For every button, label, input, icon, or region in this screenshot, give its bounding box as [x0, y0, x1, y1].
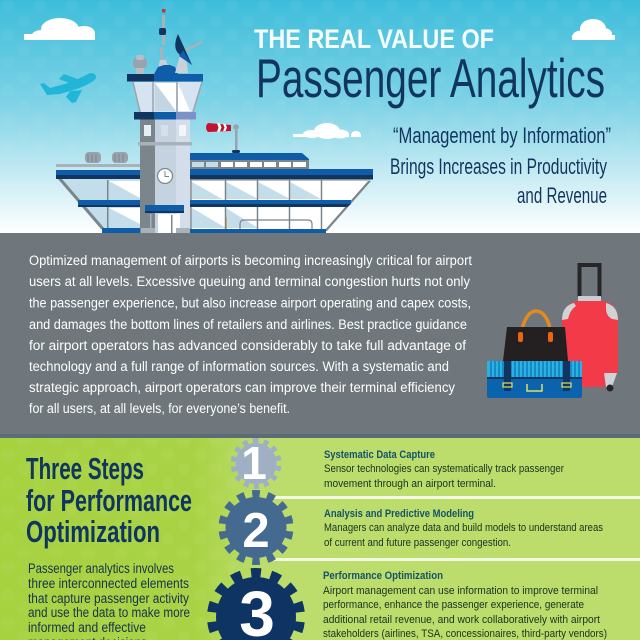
- step 1: systematic data capture: Systematic Data Capture: [324, 449, 435, 461]
- panel: green steps background: [0, 438, 640, 640]
- text block: introduction: Optimized management of airports is becoming increasingly critical for airport: [29, 253, 472, 268]
- text block: passenger analytics description: [28, 561, 190, 640]
- text block: introduction: technology and a full range of information sources. With a systematic and: [29, 359, 449, 374]
- red rolling suitcase: [562, 265, 618, 392]
- icon: gear 1: 1: [241, 437, 267, 489]
- heading: three steps: Optimization: [26, 514, 160, 549]
- heading: three steps: [26, 451, 192, 549]
- step 1: systematic data capture: Sensor technologies can systematically track passenger: [324, 463, 564, 475]
- step 1: systematic data capture: movement through an airport terminal.: [324, 478, 496, 490]
- icon: cloud middle: [293, 123, 361, 139]
- black handbag: [503, 311, 568, 361]
- step 2: analysis and predictive modeling: of current and future passenger congestion.: [324, 537, 511, 549]
- title: The Real Value Of: THE REAL VALUE OF: [254, 24, 494, 54]
- left terminal wing: [56, 152, 141, 234]
- step 3: performance optimization: stakeholders (airlines, TSA, concessionaires, third-party vendors): [323, 628, 607, 640]
- text block: introduction: strategic approach, airport operators can improve their terminal efficiency: [29, 380, 455, 395]
- text block: introduction: [29, 253, 472, 416]
- icon: gear 1: [233, 437, 279, 489]
- blue suitcase: [487, 361, 582, 398]
- step 3: performance optimization: Airport management can use information to improve terminal: [323, 585, 598, 597]
- step 2: analysis and predictive modeling: Analysis and Predictive Modeling: [324, 508, 474, 520]
- icon: gear 3: [212, 573, 300, 640]
- text block: passenger analytics description: that capture passenger activity: [28, 591, 189, 606]
- step 3: performance optimization: performance, enhance the passenger experience, generate: [323, 599, 584, 611]
- text block: passenger analytics description: informed and effective: [28, 620, 146, 635]
- panel: grey introduction band: [0, 233, 640, 438]
- illustration: airport terminal and control tower: [56, 9, 373, 234]
- text block: introduction: for airport operators has advanced considerably to take full advantage of: [29, 338, 466, 353]
- icon: gear 2: 2: [242, 504, 270, 558]
- heading: three steps: Three Steps: [26, 451, 144, 486]
- heading: three steps: for Performance: [26, 483, 192, 518]
- icon: cloud top right: [572, 19, 615, 40]
- subtitle: [390, 123, 611, 208]
- icon: luggage: [487, 265, 618, 398]
- step 3: performance optimization: additional retail revenue, and work collaboratively with airport: [323, 614, 600, 626]
- text block: introduction: and damages the bottom lines of retailers and airlines. Best practice guidance: [29, 317, 467, 332]
- step 3: performance optimization: Performance Optimization: [323, 570, 443, 582]
- text block: passenger analytics description: and use the data to make more: [28, 605, 190, 620]
- icon: cloud top left: [24, 18, 95, 40]
- icon: airplane: [40, 73, 96, 103]
- step 1: systematic data capture: [324, 449, 564, 490]
- step 2: analysis and predictive modeling: Managers can analyze data and build models to understand areas: [324, 522, 603, 534]
- text block: passenger analytics description: Passenger analytics involves: [28, 561, 174, 576]
- text block: introduction: users at all levels. Excessive queuing and terminal congestion hurts not only: [29, 274, 470, 289]
- right terminal building: [189, 153, 373, 234]
- icon: gear 2: [222, 494, 290, 561]
- panel: sky header background: [0, 0, 640, 233]
- text block: passenger analytics description: three interconnected elements: [28, 576, 189, 591]
- step 2: analysis and predictive modeling: [324, 508, 603, 549]
- control tower: [127, 9, 203, 234]
- text block: introduction: for all users, at all levels, for everyone’s benefit.: [29, 401, 290, 416]
- step 3: performance optimization: [323, 570, 607, 640]
- icon: windsock: [206, 123, 240, 153]
- text block: introduction: the passenger experience, but also increase airport operating and capex costs,: [29, 296, 471, 310]
